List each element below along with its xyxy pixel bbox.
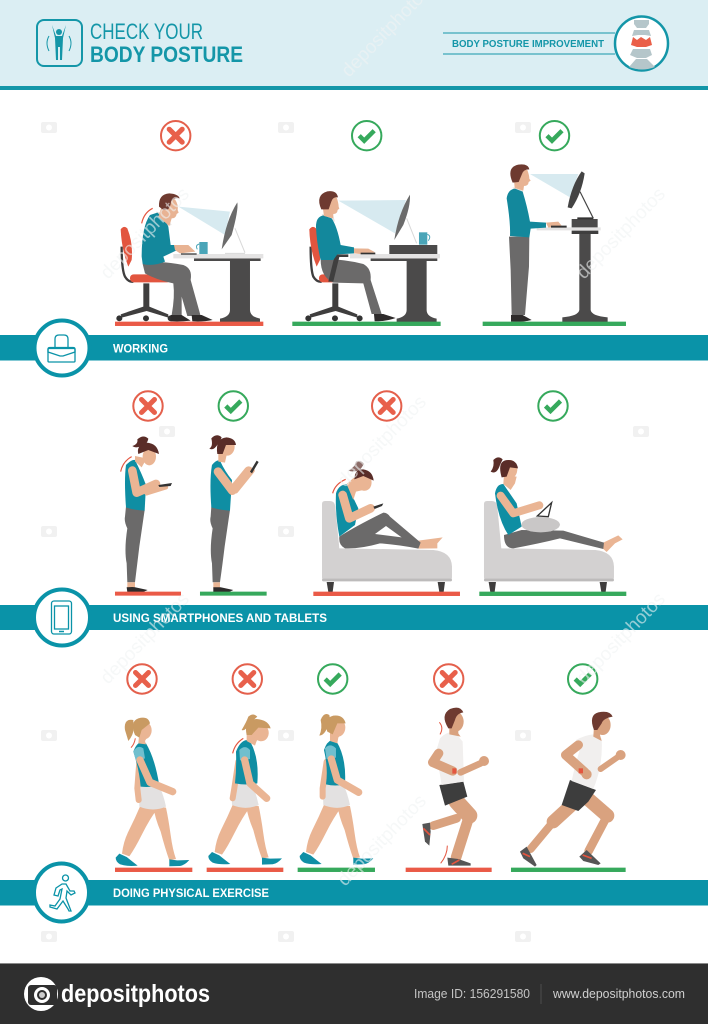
scene: bad sitting posture (115, 193, 263, 326)
scene: good sofa posture (479, 457, 626, 596)
watermark text: depositphotos (572, 589, 670, 688)
scene: good sitting posture (292, 191, 441, 326)
watermark text: depositphotos (333, 392, 431, 491)
scene: bad smartphone standing (115, 436, 181, 596)
title: CHECK YOUR (90, 19, 203, 44)
footer (0, 963, 708, 1024)
status icons: exercise (127, 664, 597, 694)
logo: camera (24, 977, 58, 1011)
image id: Image ID: 156291580 (414, 987, 530, 1001)
section bar: smartphones (0, 590, 708, 646)
scene: bad sofa posture (313, 461, 460, 596)
scene: good smartphone standing (200, 435, 267, 596)
scene: walking poor posture 1 (115, 718, 192, 872)
header band (0, 0, 708, 90)
subtitle rules and label (443, 33, 615, 54)
scene: standing desk (483, 164, 626, 326)
scene: running poor posture (406, 708, 492, 872)
watermark text (96, 0, 670, 890)
scene: walking poor posture 2 (207, 714, 283, 872)
label: working: WORKING (113, 342, 168, 356)
section bar: working (0, 320, 708, 376)
status icons: working (161, 121, 569, 150)
subtitle rules and label: BODY POSTURE IMPROVEMENT (452, 38, 605, 50)
icon: smartphone (52, 601, 72, 634)
label: smartphones: USING SMARTPHONES AND TABLETS (113, 611, 327, 625)
scene: walking good posture (298, 714, 375, 872)
watermark text: depositphotos (333, 791, 431, 890)
label: exercise: DOING PHYSICAL EXERCISE (113, 886, 269, 900)
status icons: smartphones (133, 391, 568, 421)
watermark text: depositphotos (96, 589, 194, 688)
watermark text: depositphotos (96, 184, 194, 283)
section bar: exercise (0, 864, 708, 922)
icon: runner (50, 875, 75, 911)
website: www.depositphotos.com (552, 987, 685, 1001)
scene: running good posture (511, 712, 626, 872)
icon: posture figure (37, 20, 82, 66)
title bold line: BODY POSTURE (90, 42, 243, 67)
watermark text: depositphotos (572, 184, 670, 283)
watermark camera marks (41, 122, 649, 942)
icon: briefcase (48, 335, 75, 362)
icon: spine (615, 16, 668, 70)
logo: wordmark: depositphotos (61, 980, 210, 1008)
